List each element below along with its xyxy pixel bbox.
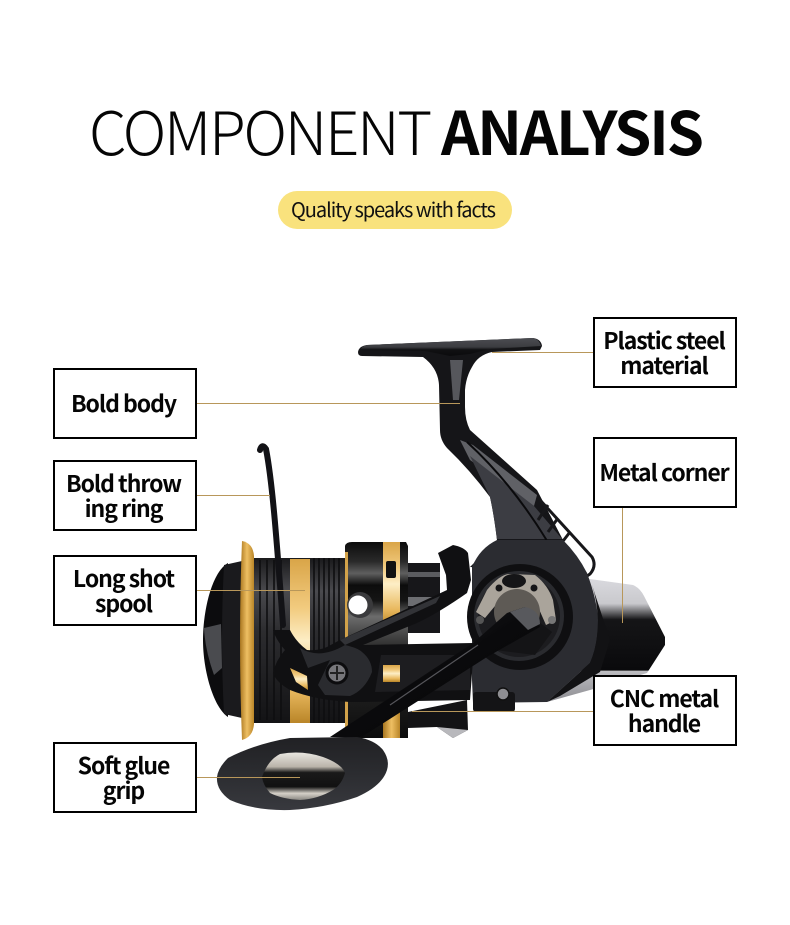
soft grip knob xyxy=(217,737,388,810)
bail arm xyxy=(273,545,473,702)
subtitle pill: Quality speaks with facts xyxy=(291,194,495,223)
subtitle pill xyxy=(278,191,512,229)
label: long shot spool: spool xyxy=(95,584,152,618)
label: plastic steel material: Plastic steel xyxy=(603,322,725,356)
label: plastic steel material: material xyxy=(620,346,708,380)
label: soft glue grip: Soft glue xyxy=(78,746,169,780)
gold spool flange xyxy=(240,541,254,740)
leader line: soft glue grip xyxy=(196,776,300,778)
label: soft glue grip xyxy=(53,742,197,813)
label: bold body: Bold body xyxy=(71,385,176,419)
handle arm xyxy=(330,607,540,738)
label: bold throw ring: Bold throw xyxy=(66,464,181,498)
bail wire xyxy=(260,446,283,625)
gearbox body xyxy=(467,540,610,712)
label: long shot spool: Long shot xyxy=(73,560,174,594)
gearbox tail xyxy=(520,579,665,702)
label: CNC metal handle xyxy=(593,675,737,746)
label: bold throw ring xyxy=(53,460,197,531)
label: bold body xyxy=(53,368,197,439)
label: soft glue grip: grip xyxy=(103,772,144,806)
label: plastic steel material xyxy=(593,317,737,388)
label: CNC metal handle: handle xyxy=(628,704,700,738)
rear drag dome xyxy=(203,561,242,718)
text: COMPONENT xyxy=(89,86,430,173)
label: CNC metal handle: CNC metal xyxy=(610,680,718,714)
leader line: bold throw ring xyxy=(196,494,270,496)
rotor xyxy=(345,542,468,738)
leader line: bold body xyxy=(196,402,460,404)
leader line: plastic steel xyxy=(492,352,594,354)
label: bold throw ring: ing ring xyxy=(85,490,162,524)
title xyxy=(89,86,702,173)
line spool xyxy=(252,558,348,723)
leader line: metal corner xyxy=(622,506,624,623)
label: metal corner: Metal corner xyxy=(599,454,729,488)
reel foot and stem xyxy=(358,338,594,578)
label: metal corner xyxy=(593,437,737,508)
leader line: long shot spool xyxy=(196,590,305,592)
text: ANALYSIS xyxy=(441,86,702,173)
label: long shot spool xyxy=(53,555,197,626)
leader line: CNC metal handle xyxy=(412,710,594,712)
